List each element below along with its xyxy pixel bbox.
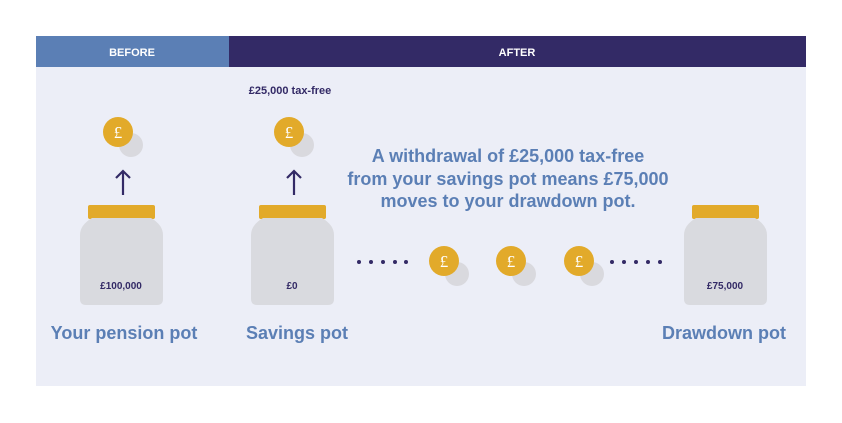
icon: coin 1 — [103, 117, 143, 157]
icon: coin 2 — [274, 117, 314, 157]
jar: drawdown pot — [684, 205, 767, 305]
header: after: AFTER — [499, 47, 535, 59]
coins row — [429, 246, 604, 286]
dots right — [610, 260, 662, 264]
arrow 1 — [116, 171, 130, 195]
labels: Your pension pot — [51, 323, 197, 343]
jar: pension pot: £100,000 — [100, 281, 142, 292]
text block: explanation: from your savings pot means £75,000 — [347, 169, 669, 189]
text block: explanation: A withdrawal of £25,000 tax-free — [372, 146, 644, 166]
arrow 2 — [287, 171, 301, 195]
jar: savings pot: £0 — [286, 281, 298, 292]
jar: drawdown pot: £75,000 — [707, 281, 744, 292]
text block: explanation: moves to your drawdown pot. — [380, 191, 636, 211]
header: before: BEFORE — [109, 47, 155, 59]
labels — [51, 323, 786, 343]
dots left — [357, 260, 408, 264]
label: tax-free amount: £25,000 tax-free — [249, 85, 331, 97]
panel: background — [36, 36, 806, 386]
text block: explanation — [347, 146, 669, 211]
jar: pension pot — [80, 205, 163, 305]
header: after — [229, 36, 806, 67]
header: before — [36, 36, 229, 67]
labels: Drawdown pot — [662, 323, 786, 343]
jar: savings pot — [251, 205, 334, 305]
labels: Savings pot — [246, 323, 348, 343]
